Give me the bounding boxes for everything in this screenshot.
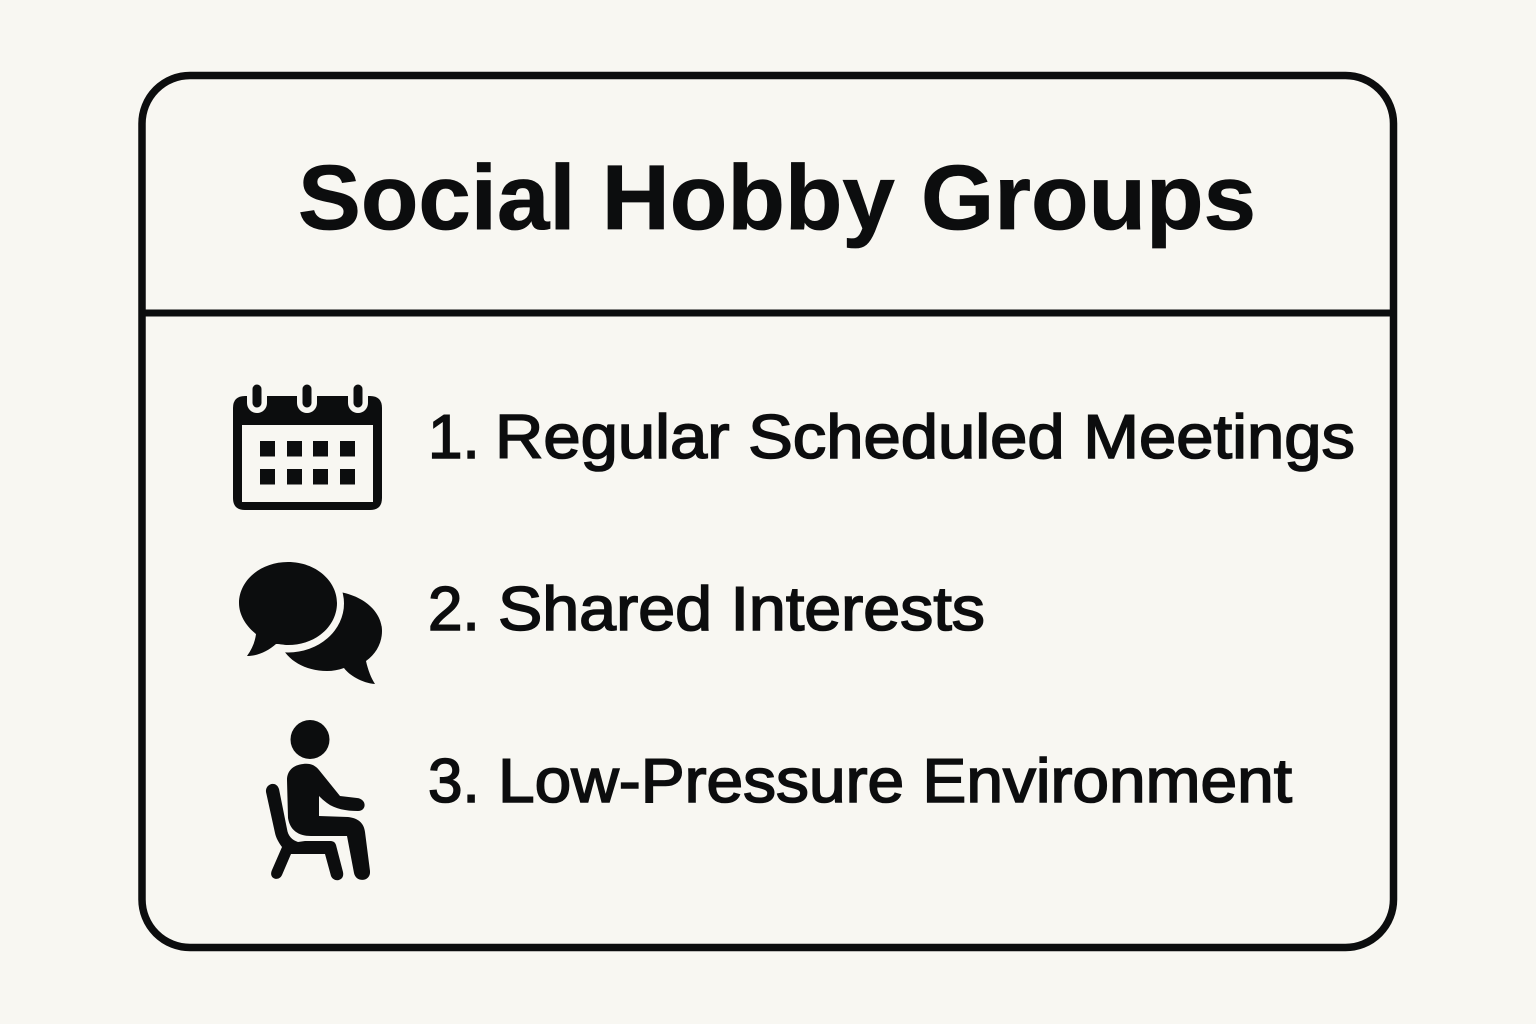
icon: seated person <box>266 720 370 880</box>
item 2 text: 2. <box>428 575 480 644</box>
icon: calendar <box>233 365 383 510</box>
item 3 text: 3. <box>428 747 480 816</box>
item 2 text: Shared Interests <box>498 575 985 644</box>
item 3 text: Low-Pressure Environment <box>498 747 1292 816</box>
panel: social hobby groups card <box>142 76 1394 948</box>
title: Social Hobby Groups <box>298 147 1256 249</box>
icon: speech bubbles <box>232 554 382 684</box>
item 1 text: Regular Scheduled Meetings <box>495 403 1355 472</box>
item 1 text: 1. <box>428 403 480 472</box>
